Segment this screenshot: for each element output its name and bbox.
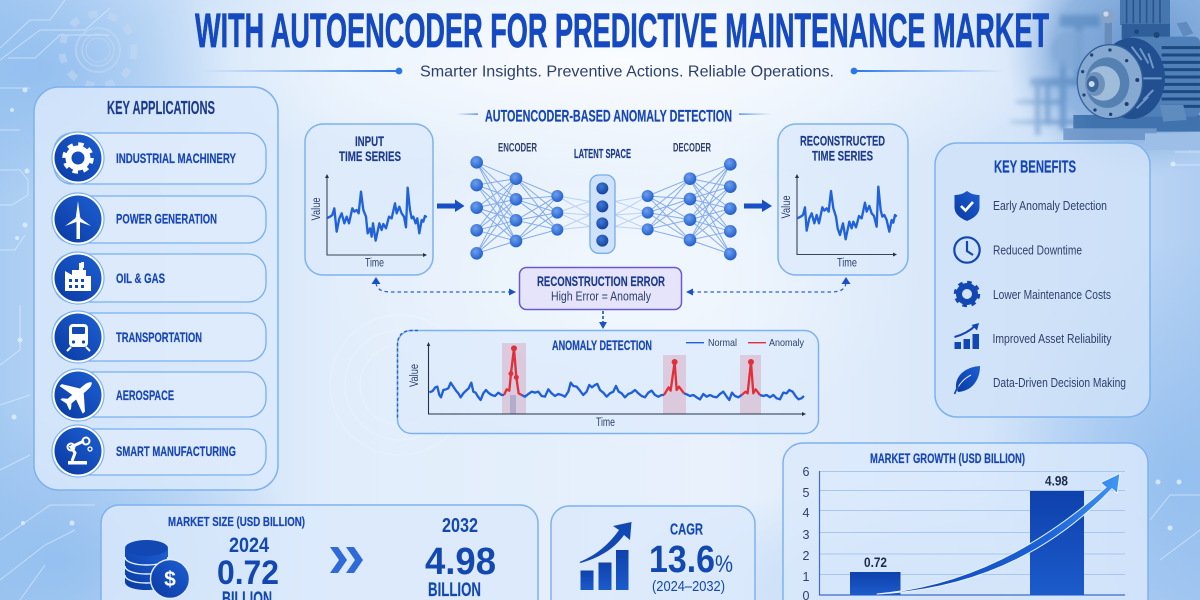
panel: key applications — [34, 87, 278, 490]
line chart: input — [311, 174, 427, 270]
row: aerospace — [52, 369, 266, 421]
row: smart manufacturing — [52, 425, 266, 477]
neural network autoencoder — [470, 141, 737, 260]
heading: autoencoder diagram: AUTOENCODER-BASED ANOMALY DETECTION — [485, 107, 732, 125]
arrow: decoder to reconstructed — [744, 200, 772, 212]
panel: CAGR: 13.6 — [649, 539, 715, 581]
icon: chevrons — [330, 547, 363, 573]
icon: coins with dollar — [125, 540, 190, 598]
row: transportation: TRANSPORTATION — [116, 329, 202, 345]
legend: Normal — [708, 337, 737, 349]
panel: anomaly detection: ANOMALY DETECTION — [552, 338, 652, 353]
panel: reconstructed time series — [778, 124, 908, 275]
legend: Anomaly — [769, 337, 805, 349]
row: transportation — [52, 311, 266, 363]
panel: input time series: TIME SERIES — [339, 148, 401, 164]
row: smart manufacturing: SMART MANUFACTURING — [116, 443, 236, 459]
line chart: input: Time — [365, 258, 384, 270]
row: industrial machinery: INDUSTRIAL MACHINERY — [116, 150, 236, 166]
panel: CAGR: (2024–2032) — [652, 578, 725, 595]
panel: market size: 2024 — [229, 534, 269, 557]
panel: market size: 0.72 — [217, 554, 279, 592]
panel: reconstructed time series: TIME SERIES — [812, 148, 873, 164]
panel: key benefits: KEY BENEFITS — [994, 156, 1076, 176]
panel: CAGR: % — [715, 551, 733, 578]
neural network autoencoder: ENCODER — [498, 141, 537, 155]
benefit: lower maintenance costs: Lower Maintenance Costs — [993, 288, 1111, 302]
panel: anomaly detection — [398, 330, 818, 434]
arrow: error to anomaly chart — [599, 311, 607, 329]
subtitle with rules — [200, 64, 1006, 80]
panel: CAGR: CAGR — [670, 522, 703, 538]
subtitle with rules: Smarter Insights. Preventive Actions. Reliable Operations. — [420, 64, 834, 80]
benefit: improved asset reliability: Improved Asset Reliability — [992, 332, 1112, 346]
line chart: anomalies: Value — [409, 364, 421, 387]
row: aerospace: AEROSPACE — [116, 387, 174, 403]
panel: CAGR — [551, 506, 755, 600]
icon: coins with dollar: $ — [164, 568, 176, 591]
panel: reconstruction error: RECONSTRUCTION ERROR — [537, 274, 665, 289]
panel: market growth — [783, 443, 1148, 600]
arrow: growth trend — [877, 473, 1120, 594]
line chart: reconstructed: Value — [781, 196, 793, 218]
line chart: reconstructed — [781, 174, 897, 270]
panel: key benefits — [935, 143, 1150, 417]
panel: market size: 2032 — [442, 515, 478, 537]
bar chart: 4.98 — [1045, 473, 1068, 489]
row: power generation: POWER GENERATION — [116, 210, 217, 226]
panel: reconstruction error: High Error = Anomaly — [551, 290, 652, 304]
line chart: anomalies: Time — [596, 417, 615, 429]
arrow: input to encoder — [437, 200, 464, 212]
benefit: early anomaly detection — [954, 191, 1107, 221]
legend — [686, 337, 805, 349]
bar chart: 5 — [803, 486, 810, 500]
row: power generation — [52, 193, 266, 245]
panel: market size: MARKET SIZE (USD BILLION) — [168, 514, 305, 529]
bar chart: 3 — [803, 528, 810, 542]
heading: key applications: KEY APPLICATIONS — [107, 98, 215, 118]
panel: input time series — [305, 124, 433, 275]
line chart: anomalies — [409, 342, 806, 429]
bar chart: 1 — [803, 570, 810, 584]
benefit: data driven decision making: Data-Driven Decision Making — [993, 376, 1126, 390]
bar chart: 2 — [803, 549, 810, 563]
bar chart: 0.72 — [864, 554, 887, 570]
bar chart — [803, 465, 1125, 600]
benefit: reduced downtime — [954, 237, 1082, 263]
neural network autoencoder: LATENT SPACE — [574, 146, 631, 161]
line chart: input: Value — [311, 198, 323, 220]
panel: market size: 4.98 — [425, 541, 496, 583]
benefit: reduced downtime: Reduced Downtime — [993, 244, 1082, 258]
benefit: early anomaly detection: Early Anomaly Detection — [993, 199, 1107, 213]
neural network autoencoder: DECODER — [673, 141, 711, 155]
row: industrial machinery — [52, 132, 266, 184]
arrow: reconstructed to error dashed — [686, 277, 850, 296]
machinery photo: electric motor — [1010, 0, 1200, 150]
arrow: input to error dashed — [372, 277, 516, 296]
benefit: lower maintenance costs — [956, 282, 1111, 306]
row: oil and gas: OIL & GAS — [116, 270, 165, 286]
row: oil and gas — [52, 252, 266, 304]
bar chart: 6 — [803, 465, 810, 479]
line chart: reconstructed: Time — [837, 258, 857, 270]
benefit: improved asset reliability — [954, 323, 1112, 349]
panel: market growth: MARKET GROWTH (USD BILLION) — [870, 451, 1025, 466]
bar chart: 4 — [803, 506, 810, 520]
benefit: data driven decision making — [954, 366, 1126, 394]
panel: reconstruction error — [520, 268, 682, 310]
panel: reconstructed time series: RECONSTRUCTED — [800, 133, 885, 149]
panel: market size — [101, 505, 538, 600]
panel: input time series: INPUT — [355, 133, 384, 149]
icon: growth bars — [580, 522, 632, 590]
